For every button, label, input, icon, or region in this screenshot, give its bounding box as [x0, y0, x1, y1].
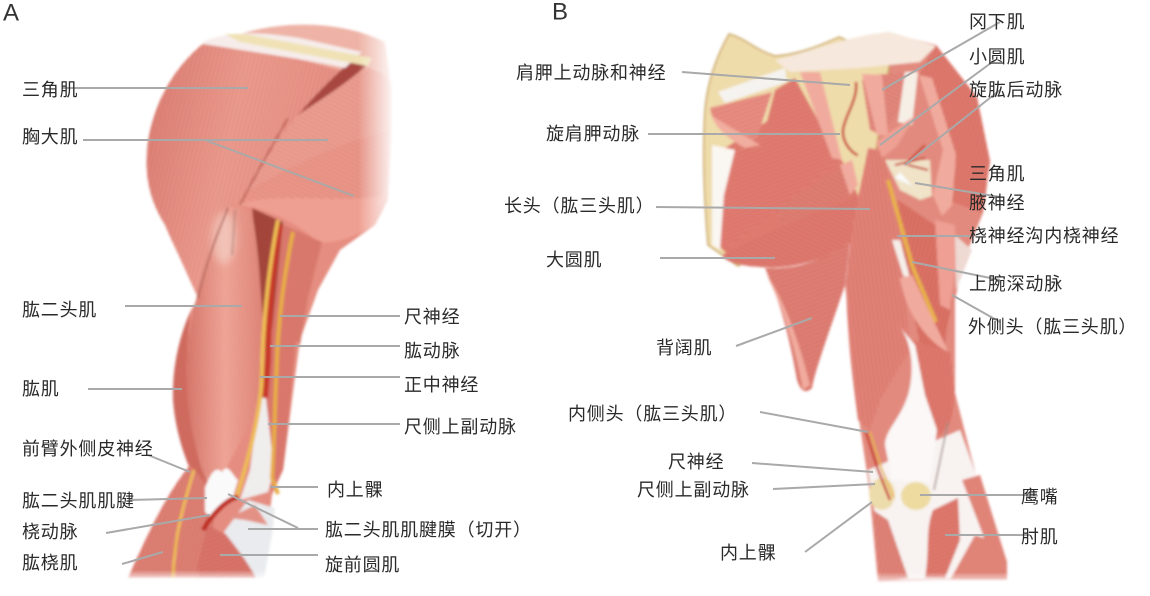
acromion tendons: [775, 32, 936, 72]
label: biceps tendon: 肱二头肌肌腱: [22, 491, 135, 511]
pronator teres: [198, 525, 258, 578]
brachioradialis: [128, 465, 215, 578]
label: superior ulnar collateral A: 尺侧上副动脉: [404, 417, 517, 437]
label: lateral cutaneous nerve: 前臂外侧皮神经: [22, 439, 154, 459]
label: lateral head triceps: 外侧头（肱三头肌）: [968, 317, 1137, 337]
cut strip: [800, 72, 842, 160]
latissimus dorsi: [765, 240, 850, 391]
ulnar nerve: [272, 232, 293, 494]
label: latissimus dorsi: 背阔肌: [656, 338, 712, 358]
teres and latissimus under pectoralis: [255, 212, 322, 345]
suprascapular and scapular arteries: [843, 82, 858, 155]
heading A: A: [3, 0, 19, 26]
white tendon streak: [240, 372, 274, 500]
pale muscle patch: [228, 505, 268, 525]
triceps medial: [258, 240, 298, 492]
label: deep brachial artery: 上腕深动脉: [969, 274, 1063, 294]
label: infraspinatus: 冈下肌: [969, 12, 1025, 32]
triceps lateral lower: [912, 340, 955, 442]
lateral cutaneous nerve: [173, 470, 194, 578]
label: axillary nerve: 腋神经: [969, 193, 1025, 213]
trapezius upper shoulder: [235, 25, 392, 90]
biceps tendon: [205, 468, 238, 518]
median nerve: [237, 220, 278, 496]
label: medial head triceps: 内侧头（肱三头肌）: [568, 404, 737, 424]
triceps tendon: [885, 325, 937, 482]
fade right and bottom edges: [120, 20, 396, 582]
leader lines panel A: [62, 88, 400, 564]
panel A: anterior arm illustration: [128, 25, 392, 578]
olecranon: [901, 482, 931, 510]
fade bottom edge: [860, 572, 1020, 586]
anconeus: [925, 498, 960, 578]
axillary area: [885, 145, 932, 200]
label: ulnar nerve A: 尺神经: [404, 307, 460, 327]
axillary pectoral shadow line: [240, 118, 288, 205]
label: radial nerve in groove: 桡神经沟内桡神经: [969, 226, 1119, 246]
tendon line: [934, 422, 948, 490]
ulnar nerve and collateral artery: [866, 432, 890, 500]
label: brachialis: 肱肌: [22, 379, 60, 399]
label: radial artery: 桡动脉: [22, 522, 78, 542]
pectoralis major: [230, 68, 392, 242]
leader lines panel B: [648, 22, 1030, 552]
white strip beside nerve: [892, 240, 912, 285]
extensor right: [950, 475, 1007, 580]
forearm flexor: [873, 510, 908, 582]
posterior arm silhouette: [845, 32, 1007, 582]
long head of triceps: [847, 148, 915, 430]
label: anconeus: 肘肌: [1021, 527, 1059, 547]
clavicle and tendon: [203, 33, 372, 68]
label: suprascapular artery and nerve: 肩胛上动脉和神经: [516, 63, 666, 83]
label: ulnar nerve B: 尺神经: [668, 452, 724, 472]
elbow white area: [868, 430, 985, 580]
cut long triceps strip: [900, 275, 948, 352]
dark gap under clavicle: [298, 60, 368, 115]
teres minor cut: [876, 116, 915, 158]
label: median nerve: 正中神经: [404, 375, 479, 395]
label: biceps: 肱二头肌: [22, 300, 97, 320]
label: pectoralis: 胸大肌: [22, 127, 78, 147]
label: posterior circumflex humeral artery: 旋肱后动脉: [969, 80, 1063, 100]
dark recess: [252, 208, 283, 330]
panel B: posterior arm illustration: [704, 32, 1007, 582]
label: circumflex scapular artery: 旋肩胛动脉: [546, 124, 640, 144]
label: long head triceps: 长头（肱三头肌）: [504, 196, 654, 216]
infraspinatus left: [718, 78, 840, 250]
lateral head of triceps: [898, 200, 972, 360]
label: pronator teres: 旋前圆肌: [325, 555, 400, 575]
label: brachial artery: 肱动脉: [404, 341, 460, 361]
medial epicondyle: [869, 478, 895, 510]
brachial artery: [265, 225, 280, 398]
infraspinatus lateral: [862, 72, 918, 135]
label: olecranon: 鹰嘴: [1021, 487, 1059, 507]
scapula bone: [704, 34, 890, 266]
deltoid muscle: [147, 42, 338, 298]
brachialis: [173, 312, 212, 492]
radial nerve: [888, 180, 936, 322]
supraspinatus: [710, 92, 772, 148]
label: deltoid A: 三角肌: [22, 80, 78, 100]
white medial patch: [712, 145, 735, 250]
label: superior ulnar collateral B: 尺侧上副动脉: [637, 480, 750, 500]
muscle floor of infraspinous fossa: [718, 100, 860, 262]
radial artery: [203, 497, 238, 530]
white band: [718, 68, 787, 103]
teres minor belly: [775, 160, 858, 226]
label: bicipital aponeurosis: 肱二头肌肌腱膜（切开）: [325, 520, 532, 540]
arm base silhouette: [128, 42, 392, 578]
label: deltoid B: 三角肌: [969, 164, 1025, 184]
label: medial epicondyle A: 内上髁: [327, 480, 383, 500]
label: medial epicondyle B: 内上髁: [720, 543, 776, 563]
biceps brachii: [187, 207, 263, 490]
label: brachioradialis: 肱桡肌: [22, 553, 78, 573]
bicipital aponeurosis: [224, 500, 275, 578]
teres major: [722, 195, 860, 268]
label: teres major: 大圆肌: [546, 250, 602, 270]
deltoid posterior: [919, 45, 990, 216]
ulnar nerve strand: [870, 432, 894, 498]
label: teres minor: 小圆肌: [969, 47, 1025, 67]
